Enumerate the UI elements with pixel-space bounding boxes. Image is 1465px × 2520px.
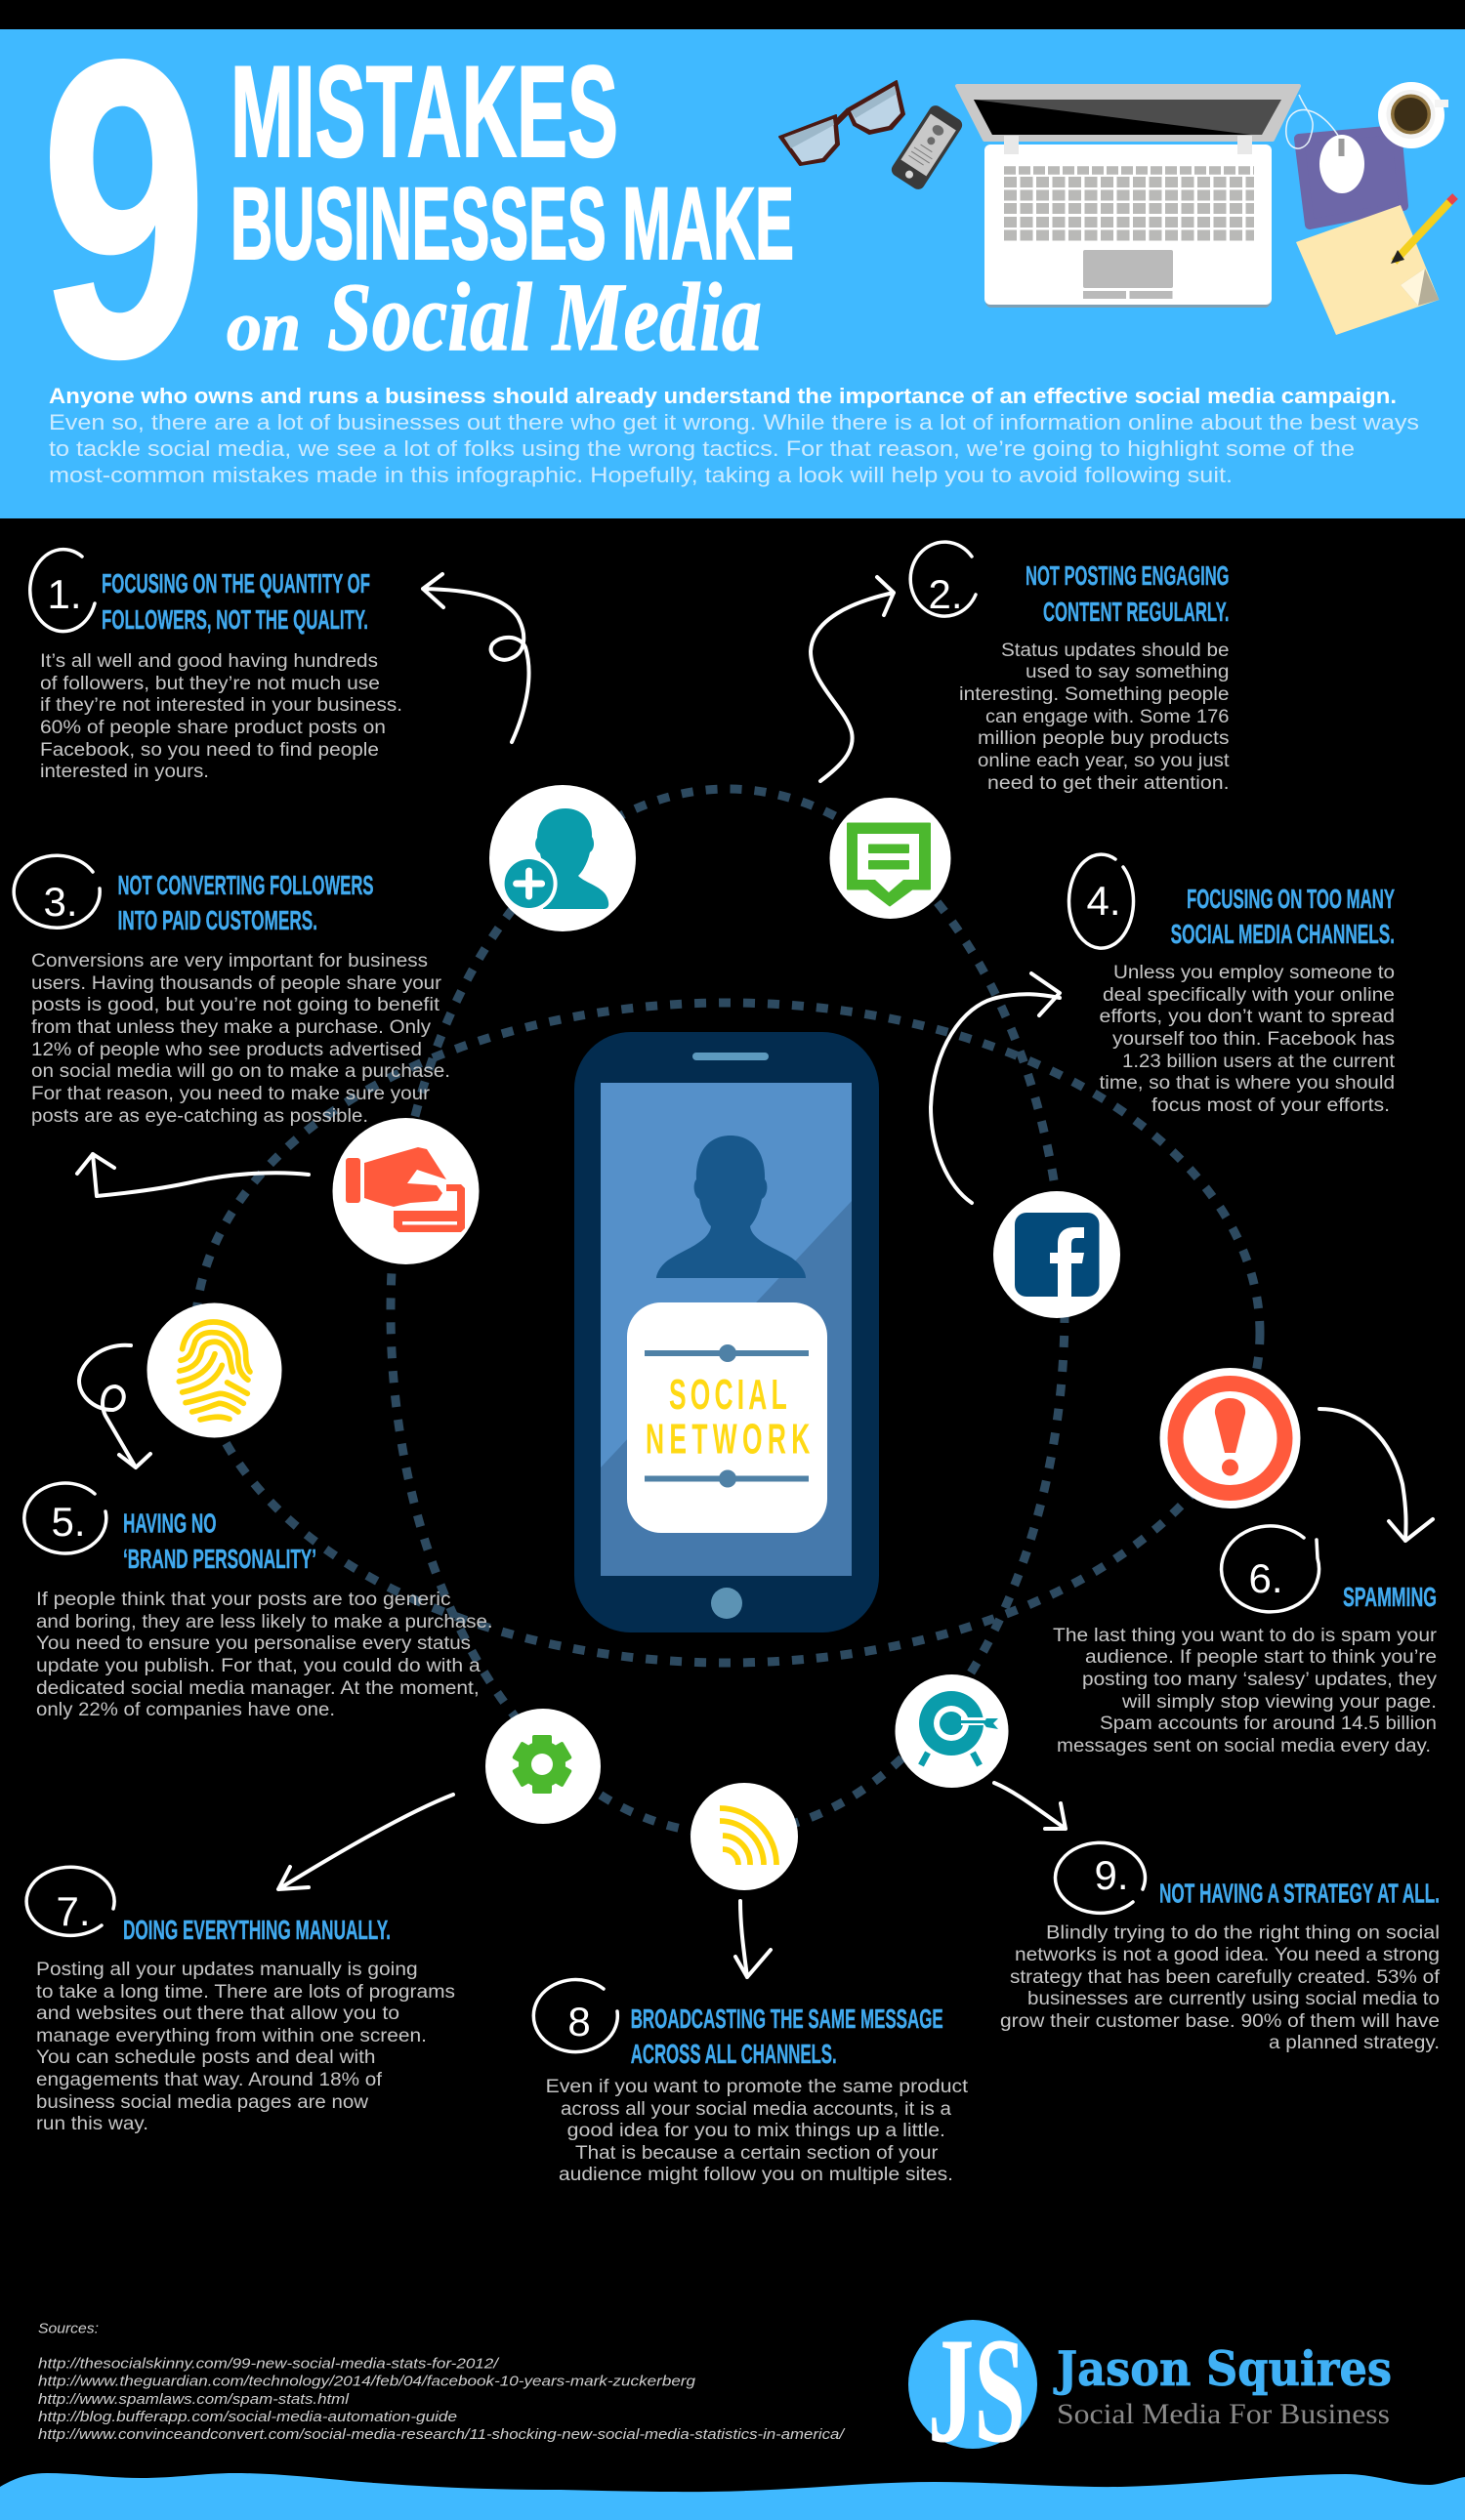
icon: alert xyxy=(1160,1368,1301,1508)
body 7: and websites out there that allow you to xyxy=(36,2004,399,2024)
body 7 xyxy=(36,1960,455,2134)
arrow: to mistake 9 xyxy=(994,1783,1066,1829)
number 6 badge xyxy=(1222,1526,1319,1612)
intro text: to tackle social media, we see a lot of folks using the wrong tactics. For that reason, we’re going to highlight some of the xyxy=(49,436,1355,461)
number 9 badge: 9. xyxy=(1094,1852,1129,1898)
number 4 badge: 4. xyxy=(1086,878,1121,924)
body 6: posting too many ‘salesy’ updates, they xyxy=(1082,1670,1438,1690)
body 2: online each year, so you just xyxy=(978,751,1230,771)
body 8: good idea for you to mix things up a little. xyxy=(567,2121,945,2141)
heading 5: ‘BRAND PERSONALITY’ xyxy=(123,1544,316,1574)
arrow: to mistake 1 xyxy=(423,574,529,742)
body 6: messages sent on social media every day. xyxy=(1057,1736,1431,1756)
body 2: interesting. Something people xyxy=(959,684,1229,705)
number 6 badge: 6. xyxy=(1248,1555,1283,1601)
heading 3 xyxy=(117,870,373,935)
sources: http://thesocialskinny.com/99-new-social-media-stats-for-2012/ xyxy=(38,2355,500,2373)
body 8: across all your social media accounts, it is a xyxy=(561,2099,951,2120)
body 9: a planned strategy. xyxy=(1269,2033,1440,2053)
illustration: glasses xyxy=(779,81,904,165)
social network card: SOCIAL xyxy=(669,1370,791,1419)
body 6: will simply stop viewing your page. xyxy=(1121,1692,1437,1713)
heading 2: NOT POSTING ENGAGING xyxy=(1026,560,1229,591)
logo: Jason Squires: JS xyxy=(928,2306,1026,2474)
body 2: used to say something xyxy=(1026,662,1229,682)
body 7: manage everything from within one screen. xyxy=(36,2026,427,2046)
logo: Jason Squires xyxy=(908,2306,1392,2474)
intro text xyxy=(49,384,1419,487)
arrow: to mistake 4 xyxy=(931,973,1060,1203)
number 1 badge xyxy=(30,550,95,632)
phone silhouette xyxy=(656,1136,806,1278)
intro text: most-common mistakes made in this infographic. Hopefully, taking a look will help you to avoid following suit. xyxy=(49,463,1233,487)
body 6: The last thing you want to do is spam your xyxy=(1053,1626,1438,1646)
heading 3: NOT CONVERTING FOLLOWERS xyxy=(117,870,373,900)
body 9: strategy that has been carefully created. 53% of xyxy=(1010,1967,1441,1988)
body 1: It’s all well and good having hundreds xyxy=(40,651,378,672)
body 2: Status updates should be xyxy=(1001,640,1229,661)
intro text: Anyone who owns and runs a business should already understand the importance of an effective social media campaign. xyxy=(49,384,1397,408)
icon: chat bubble xyxy=(830,798,951,919)
body 1 xyxy=(40,651,402,782)
body 4: 1.23 billion users at the current xyxy=(1122,1052,1396,1072)
number 5 badge xyxy=(24,1483,106,1553)
body 4: deal specifically with your online xyxy=(1103,985,1395,1006)
social network card: NETWORK xyxy=(646,1414,816,1463)
header panel xyxy=(0,0,1465,518)
number 7 badge xyxy=(26,1867,114,1935)
panel: mistake 7 xyxy=(26,1867,455,2134)
arrow: to mistake 5 xyxy=(79,1345,150,1467)
body 8 xyxy=(546,2077,969,2185)
panel: mistake 9 xyxy=(1000,1842,1441,2053)
number 3 badge: 3. xyxy=(43,879,78,925)
title: MISTAKES xyxy=(230,40,618,185)
body 5: and boring, they are less likely to make a purchase. xyxy=(36,1612,493,1632)
body 6: audience. If people start to think you’re xyxy=(1085,1647,1437,1668)
body 3: Conversions are very important for business xyxy=(31,951,428,971)
body 5: update you publish. For that, you could do with a xyxy=(36,1656,481,1676)
number 2 badge: 2. xyxy=(928,571,963,617)
body 6 xyxy=(1053,1626,1438,1756)
dashed orbit rings xyxy=(195,789,1260,1834)
heading 5: HAVING NO xyxy=(123,1508,217,1539)
heading 2: CONTENT REGULARLY. xyxy=(1043,597,1229,627)
heading 3: INTO PAID CUSTOMERS. xyxy=(117,905,317,935)
number 3 badge xyxy=(14,855,100,928)
logo: Jason Squires: Social Media For Business xyxy=(1057,2398,1390,2430)
arrow: to mistake 7 xyxy=(278,1795,453,1889)
number 7 badge: 7. xyxy=(56,1888,91,1934)
illustration: notepad and pencil xyxy=(1296,196,1455,335)
number 8 badge: 8 xyxy=(567,1999,591,2045)
title: on xyxy=(227,287,301,365)
icon: target xyxy=(895,1674,1008,1788)
body 9: Blindly trying to do the right thing on social xyxy=(1046,1923,1440,1943)
heading 5 xyxy=(123,1508,316,1574)
heading 1 xyxy=(102,568,370,635)
body 1: of followers, but they’re not much use xyxy=(40,674,380,694)
body 3: from that unless they make a purchase. Only xyxy=(31,1017,432,1038)
body 7: run this way. xyxy=(36,2114,148,2134)
body 2 xyxy=(959,640,1230,794)
body 8: That is because a certain section of your xyxy=(575,2143,939,2164)
heading 8 xyxy=(631,2004,943,2069)
heading 1: FOCUSING ON THE QUANTITY OF xyxy=(102,568,370,599)
illustration: laptop xyxy=(957,86,1299,308)
panel: mistake 4 xyxy=(1069,854,1396,1116)
icon: fingerprint xyxy=(146,1302,281,1437)
body 9: businesses are currently using social media to xyxy=(1027,1989,1440,2009)
body 7: engagements that way. Around 18% of xyxy=(36,2070,383,2090)
body 3: posts is good, but you’re not going to benefit xyxy=(31,995,440,1015)
sources: Sources: xyxy=(38,2320,99,2337)
body 4: yourself too thin. Facebook has xyxy=(1112,1029,1395,1050)
heading 1: FOLLOWERS, NOT THE QUALITY. xyxy=(102,604,368,635)
illustration: mouse pad and mouse xyxy=(1286,95,1403,225)
body 3: users. Having thousands of people share your xyxy=(31,973,442,994)
panel: mistake 2 xyxy=(910,542,1230,794)
body 4 xyxy=(1100,963,1396,1116)
number 2 badge xyxy=(910,542,976,617)
body 9: grow their customer base. 90% of them will have xyxy=(1000,2011,1440,2032)
body 7: You can schedule posts and deal with xyxy=(36,2047,375,2068)
arrow: to mistake 2 xyxy=(811,577,894,781)
sources: http://blog.bufferapp.com/social-media-automation-guide xyxy=(38,2409,457,2425)
title xyxy=(40,0,794,445)
body 3 xyxy=(31,951,450,1127)
icon: rss signal xyxy=(691,1783,798,1890)
illustration: phone xyxy=(889,103,965,192)
number 1 badge: 1. xyxy=(47,571,82,617)
body 7: Posting all your updates manually is going xyxy=(36,1960,418,1980)
heading 8: BROADCASTING THE SAME MESSAGE xyxy=(631,2004,943,2034)
heading 4 xyxy=(1171,884,1395,949)
heading 7: DOING EVERYTHING MANUALLY. xyxy=(123,1915,391,1945)
title: BUSINESSES MAKE xyxy=(230,167,794,281)
body 3: posts are as eye-catching as possible. xyxy=(31,1106,368,1127)
intro text: Even so, there are a lot of businesses out there who get it wrong. While there is a lot of information online about the best ways xyxy=(49,410,1419,434)
social network card xyxy=(627,1302,827,1533)
body 3: 12% of people who see products advertised xyxy=(31,1040,422,1060)
icon: add person xyxy=(489,785,636,931)
body 9 xyxy=(1000,1923,1441,2053)
panel: mistake 3 xyxy=(14,855,450,1127)
heading 8: ACROSS ALL CHANNELS. xyxy=(631,2039,837,2069)
arrow: to mistake 6 xyxy=(1319,1409,1433,1541)
body 5 xyxy=(36,1590,493,1720)
body 8: audience might follow you on multiple sites. xyxy=(559,2165,953,2185)
heading 2 xyxy=(1026,560,1229,627)
body 2: can engage with. Some 176 xyxy=(985,707,1229,727)
sources: http://www.convinceandconvert.com/social-media-research/11-shocking-new-social-media-statistics-in-america/ xyxy=(38,2426,846,2443)
body 7: business social media pages are now xyxy=(36,2092,368,2113)
body 5: You need to ensure you personalise every status xyxy=(36,1633,471,1654)
icon: gear xyxy=(485,1709,601,1824)
central phone xyxy=(574,1032,879,1632)
number 8 badge xyxy=(533,1980,617,2052)
body 6: Spam accounts for around 14.5 billion xyxy=(1100,1714,1437,1734)
body 3: on social media will go on to make a purchase. xyxy=(31,1061,450,1082)
panel: mistake 1 xyxy=(30,550,402,782)
body 5: If people think that your posts are too generic xyxy=(36,1590,451,1610)
logo: Jason Squires: Jason Squires xyxy=(1053,2340,1392,2397)
body 1: interested in yours. xyxy=(40,762,209,782)
panel: mistake 6 xyxy=(1053,1526,1438,1756)
sources: http://www.theguardian.com/technology/2014/feb/04/facebook-10-years-mark-zuckerberg xyxy=(38,2374,696,2390)
body 2: need to get their attention. xyxy=(987,773,1229,794)
body 8: Even if you want to promote the same product xyxy=(546,2077,969,2097)
illustration: coffee cup xyxy=(1378,82,1448,148)
panel: mistake 5 xyxy=(24,1483,493,1720)
body 4: time, so that is where you should xyxy=(1100,1073,1395,1094)
arrow: to mistake 8 xyxy=(735,1901,771,1977)
icon: facebook xyxy=(993,1191,1120,1318)
arrow: to mistake 3 xyxy=(77,1154,309,1196)
number 9 badge xyxy=(1055,1842,1145,1913)
icon: hand with card xyxy=(332,1118,479,1264)
title: Social Media xyxy=(327,263,762,371)
body 1: if they’re not interested in your business. xyxy=(40,695,402,716)
body 4: efforts, you don’t want to spread xyxy=(1100,1007,1395,1027)
body 4: Unless you employ someone to xyxy=(1113,963,1395,983)
body 1: 60% of people share product posts on xyxy=(40,718,386,738)
body 1: Facebook, so you need to find people xyxy=(40,740,379,761)
sources: http://www.spamlaws.com/spam-stats.html xyxy=(38,2391,350,2408)
panel: mistake 8 xyxy=(533,1980,969,2185)
sources xyxy=(38,2320,846,2443)
number 4 badge xyxy=(1069,854,1134,948)
body 7: to take a long time. There are lots of programs xyxy=(36,1982,455,2003)
body 2: million people buy products xyxy=(978,728,1229,749)
bottom wave xyxy=(0,2473,1465,2520)
body 5: dedicated social media manager. At the moment, xyxy=(36,1678,480,1699)
body 3: For that reason, you need to make sure your xyxy=(31,1084,431,1104)
body 9: networks is not a good idea. You need a strong xyxy=(1015,1945,1440,1965)
body 5: only 22% of companies have one. xyxy=(36,1700,335,1720)
body 4: focus most of your efforts. xyxy=(1151,1095,1390,1116)
number 5 badge: 5. xyxy=(51,1499,86,1545)
